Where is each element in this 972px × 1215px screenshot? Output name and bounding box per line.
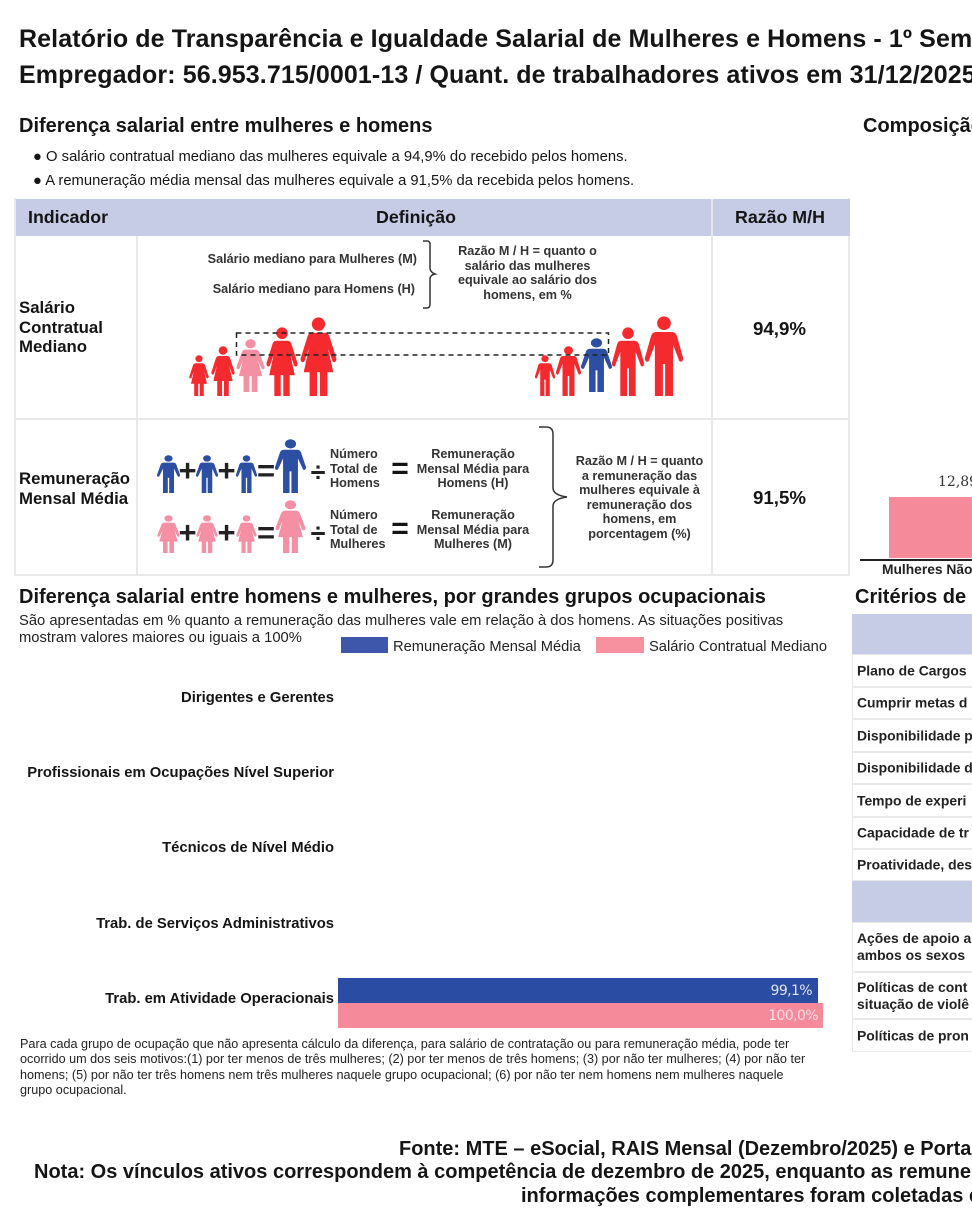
bullet: median salary: ● O salário contratual mediano das mulheres equivale a 94,9% do recebido pelos homens. [33, 149, 628, 165]
note: ratio lower: homens, em [603, 512, 676, 526]
text: mean pay men: Homens (H) [438, 476, 508, 490]
swatch [341, 637, 388, 653]
header: Indicador: Indicador [28, 207, 108, 227]
note: ratio lower: mulheres equivale à [579, 483, 700, 497]
criteria row: Disponibilidade p [857, 727, 972, 743]
equals women: = [391, 512, 409, 545]
row label: Remuneração Mensal Média [19, 469, 130, 508]
icon: men sum [157, 439, 306, 493]
description text [19, 613, 783, 646]
heading: wage difference: Diferença salarial entre mulheres e homens [19, 115, 433, 137]
criteria row [852, 719, 972, 752]
criteria row: Políticas de pron [857, 1027, 969, 1043]
text: total women [330, 508, 386, 551]
heading: criteria: Critérios de [855, 586, 966, 608]
criteria row [852, 972, 972, 1019]
operators: + [217, 453, 236, 488]
table header row [16, 199, 850, 236]
icon: brace top row [423, 240, 438, 309]
criteria table header 2 [852, 881, 972, 922]
footnote: grupo ocupacional. [20, 1083, 127, 1097]
description text: mostram valores maiores ou iguais a 100% [19, 630, 302, 646]
axis [860, 559, 972, 560]
note: ratio top: equivale ao salário dos [458, 273, 597, 287]
description text: São apresentadas em % quanto a remuneração das mulheres vale em relação à dos homens. As situações positivas [19, 613, 783, 629]
table horizontal rule [15, 418, 849, 420]
criteria row: Ações de apoio a [857, 930, 971, 946]
bar [889, 497, 972, 558]
operators: = [257, 515, 275, 550]
criteria row: ambos os sexos [857, 947, 965, 963]
text: total men [330, 447, 380, 490]
note: ratio lower: porcentagem (%) [588, 527, 691, 541]
icon: men row [535, 316, 683, 396]
footnote: homens; (5) por não ter três homens nem três mulheres naquele grupo ocupacional; (6) por não ter nem homens nem mulheres naquele [20, 1068, 784, 1082]
label: Remuneração Mensal Média [393, 638, 581, 654]
operators: = [257, 453, 275, 488]
note: ratio lower: a remuneração das [582, 469, 697, 483]
criteria row: Proatividade, des [857, 856, 972, 872]
chart label: technicians: Técnicos de Nível Médio [162, 840, 334, 856]
criteria row [852, 849, 972, 881]
chart label: managers: Dirigentes e Gerentes [181, 690, 334, 706]
label: median women: Salário mediano para Mulheres (M) [208, 252, 417, 266]
icon: women row [189, 317, 336, 396]
criteria row [852, 654, 972, 687]
label: median men: Salário mediano para Homens (H) [213, 282, 415, 296]
criteria row [852, 687, 972, 719]
bar: operational contract salary [338, 1003, 823, 1028]
operators: ÷ [311, 457, 326, 487]
footnote: ocorrido um dos seis motivos:(1) por ter menos de três mulheres; (2) por ter menos de três homens; (3) por não ter mulheres; (4) por não ter [20, 1052, 805, 1066]
criteria row: Políticas de cont [857, 978, 967, 994]
table vertical rule 1 [136, 236, 138, 575]
median dashed box [236, 333, 608, 355]
note: ratio top [458, 244, 597, 302]
subtitle: employer: Empregador: 56.953.715/0001-13 / Quant. de trabalhadores ativos em 31/12/2025 [19, 61, 972, 89]
axis label: Mulheres Não [882, 562, 972, 577]
value: 94,9%: 94,9% [753, 318, 806, 339]
operators: + [178, 515, 197, 550]
source line: Fonte: MTE – eSocial, RAIS Mensal (Dezembro/2025) e Portal [399, 1138, 972, 1160]
header: Razão M/H: Razão M/H [735, 207, 825, 227]
criteria row: Tempo de experi [857, 792, 966, 808]
operators: + [178, 453, 197, 488]
text: total women: Mulheres [330, 537, 386, 551]
operators: + [217, 515, 236, 550]
row label: Salário Contratual Mediano: Contratual [19, 318, 103, 336]
chart label: professionals: Profissionais em Ocupações Nível Superior [27, 765, 334, 781]
criteria row [852, 922, 972, 972]
legend: contract salary [596, 637, 827, 654]
operators [178, 453, 326, 550]
text: total men: Homens [330, 476, 380, 490]
row label: Remuneração Mensal Média: Remuneração [19, 469, 130, 488]
note: ratio lower: remuneração dos [587, 498, 692, 512]
icon: brace lower row [539, 426, 568, 568]
icon: women sum [157, 500, 306, 553]
footnote: Para cada grupo de ocupação que não apresenta cálculo da diferença, para salário de contratação ou para remuneração média, pode ter [20, 1037, 789, 1051]
heading: occupational groups: Diferença salarial entre homens e mulheres, por grandes grupos ocupacionais [19, 586, 766, 608]
criteria row [852, 817, 972, 849]
criteria row: Cumprir metas d [857, 694, 967, 710]
text: mean pay men [417, 447, 530, 490]
diagram: mean pay formula [157, 439, 326, 553]
panel: indicator table [14, 198, 850, 576]
operators: ÷ [311, 518, 326, 548]
label: Salário Contratual Mediano [649, 638, 827, 654]
text: total men: Total de [330, 462, 378, 476]
value: 91,5%: 91,5% [753, 487, 806, 508]
text: total men: Número [330, 447, 378, 461]
swatch [596, 637, 644, 653]
text: mean pay women: Remuneração [431, 508, 515, 522]
legend: mean pay [341, 637, 581, 654]
text: mean pay women: Mulheres (M) [434, 537, 512, 551]
note: ratio lower: Razão M / H = quanto [576, 454, 703, 468]
criteria table header 1 [852, 614, 972, 654]
bar: operational mean pay [338, 978, 818, 1003]
value: 99,1% [771, 983, 812, 999]
note: ratio top: Razão M / H = quanto o [458, 244, 597, 258]
criteria row: Plano de Cargos [857, 662, 967, 678]
row label: Salário Contratual Mediano: Salário [19, 298, 75, 317]
note: ratio top: salário das mulheres [465, 259, 590, 273]
row label: Salário Contratual Mediano [19, 298, 103, 356]
note: ratio top: homens, em % [483, 288, 572, 302]
text: total women: Número [330, 508, 378, 522]
chart label: administrative: Trab. de Serviços Administrativos [96, 916, 334, 932]
value: 100,0% [768, 1008, 818, 1024]
criteria row: Disponibilidade d [857, 760, 972, 776]
text: mean pay men: Remuneração [431, 447, 515, 461]
note: ratio lower [576, 454, 703, 541]
criteria row [852, 784, 972, 817]
row label: Remuneração Mensal Média: Mensal Média [19, 488, 128, 508]
row label: Salário Contratual Mediano: Mediano [19, 337, 87, 356]
text: total women: Total de [330, 523, 378, 537]
equals men: = [391, 452, 409, 485]
criteria row: Capacidade de tr [857, 824, 969, 840]
footnote [20, 1037, 805, 1097]
text: mean pay men: Mensal Média para [417, 462, 529, 476]
text: mean pay women: Mensal Média para [417, 523, 529, 537]
text: mean pay women [417, 508, 530, 551]
bullet: mean pay: ● A remuneração média mensal das mulheres equivale a 91,5% da recebida pelos homens. [33, 173, 634, 189]
criteria row [852, 752, 972, 784]
header: Definição: Definição [376, 207, 456, 227]
diagram: median women and men [189, 316, 683, 396]
composition chart: partial bar [860, 474, 972, 577]
criteria row [852, 1019, 972, 1052]
table vertical rule 2 [711, 199, 713, 575]
criteria row: situação de violê [857, 996, 969, 1012]
chart label: operational: Trab. em Atividade Operacionais [105, 991, 334, 1007]
